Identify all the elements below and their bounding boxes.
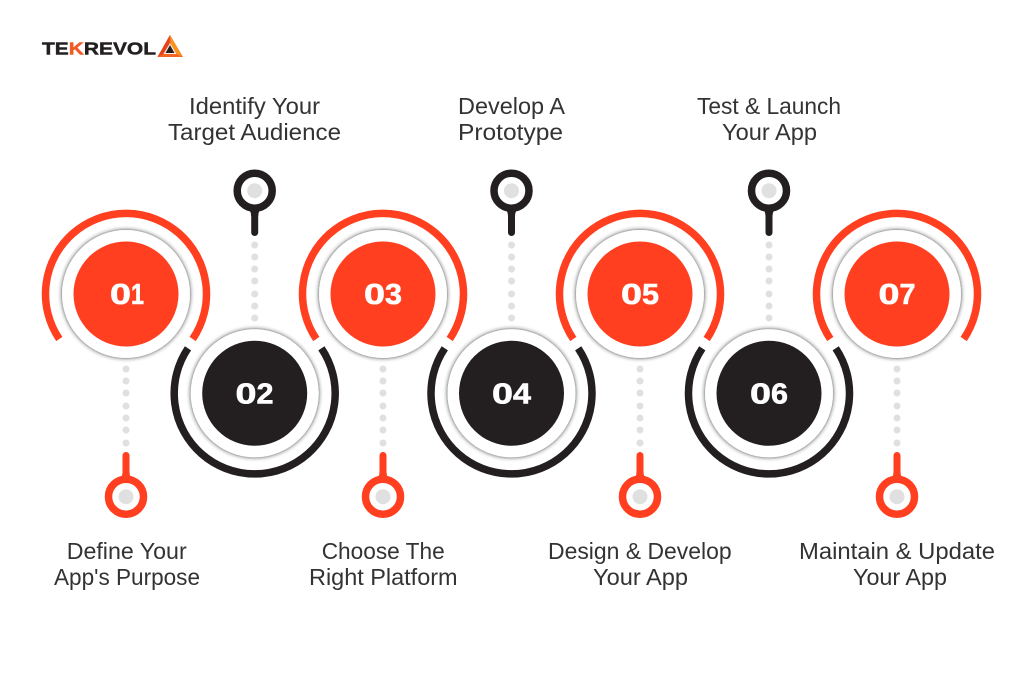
step 7: Maintain & Update Your App (799, 213, 995, 590)
pin marker (108, 452, 144, 514)
white ring (833, 230, 961, 358)
label: Maintain & Update (799, 538, 995, 564)
pin marker (622, 452, 658, 514)
step 6: Test & Launch Your App (689, 93, 850, 474)
logo triangle mark (158, 35, 183, 57)
label: App's Purpose (54, 564, 200, 590)
pin marker (752, 173, 786, 236)
outer arc (302, 213, 464, 339)
label: Define Your (67, 538, 187, 564)
number 07: 07 (878, 279, 916, 311)
logo wordmark: TEKREVOL (42, 38, 156, 58)
connector dots (380, 366, 386, 446)
label: Your App (853, 564, 947, 590)
label: Identify Your (189, 93, 320, 119)
step 1: Define Your App's Purpose (45, 213, 206, 590)
connector dots (766, 242, 772, 322)
connector dots (122, 366, 130, 446)
outer arc (431, 348, 592, 474)
number 04: 04 (492, 378, 531, 410)
pin marker (237, 173, 272, 236)
connector dots (894, 366, 900, 446)
outer arc (816, 213, 977, 339)
outer arc (45, 213, 206, 339)
number 01: 01 (110, 279, 144, 311)
white ring (319, 230, 447, 358)
white ring (448, 329, 576, 457)
outer arc (174, 348, 335, 474)
white ring (62, 230, 190, 358)
number 05: 05 (621, 279, 659, 311)
number disc (330, 242, 436, 346)
step 2: Identify Your Target Audience (168, 93, 341, 474)
pin marker (494, 173, 529, 236)
number 03: 03 (364, 279, 402, 311)
number disc (459, 341, 564, 446)
outer arc (560, 213, 720, 339)
outer arc (689, 348, 850, 474)
number disc (202, 341, 307, 446)
step 3: Choose The Right Platform (302, 213, 464, 590)
connector dots (251, 242, 258, 322)
label: Your App (722, 119, 817, 145)
number 06: 06 (750, 378, 788, 410)
pin marker (880, 452, 914, 514)
label: Your App (593, 564, 688, 590)
number 02: 02 (236, 378, 274, 410)
number disc (74, 242, 178, 346)
number disc (716, 341, 822, 446)
number disc (844, 242, 950, 346)
label: Test & Launch (697, 93, 841, 119)
label: Develop A (458, 93, 565, 119)
connector dots (508, 242, 515, 322)
label: Design & Develop (548, 538, 732, 564)
number disc (588, 242, 692, 346)
label: Choose The (322, 538, 445, 564)
step 4: Develop A Prototype (431, 93, 592, 474)
pin marker (366, 452, 400, 514)
label: Prototype (458, 119, 563, 145)
logo: Tekrevol (42, 35, 183, 58)
connector dots (636, 366, 644, 446)
white ring (705, 329, 833, 457)
white ring (191, 329, 319, 457)
step 5: Design & Develop Your App (548, 213, 732, 590)
label: Target Audience (168, 119, 341, 145)
white ring (576, 230, 704, 358)
label: Right Platform (309, 564, 458, 590)
